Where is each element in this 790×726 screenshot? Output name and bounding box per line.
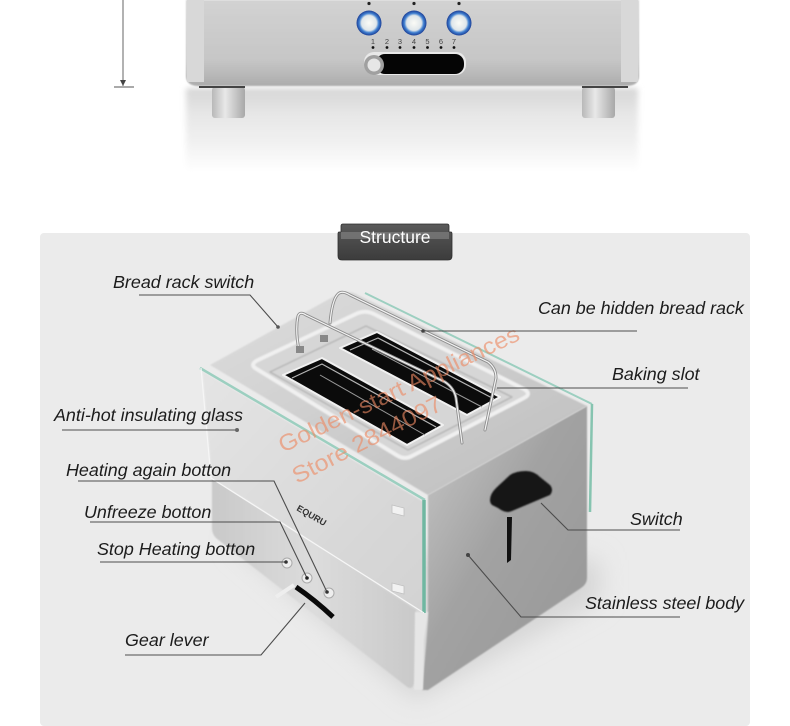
toaster body [186,0,639,86]
reflection below toaster [186,88,638,172]
brand plate: EQURU [295,503,328,528]
black switch handle [490,471,552,563]
callout: Gear lever [125,603,305,655]
bread slot front [283,358,443,445]
callout: Heating again botton: Heating again botton [66,460,231,480]
heading tab: Structure [338,224,452,260]
callout: Stainless steel body: Stainless steel body [585,593,745,613]
gear scale 1-7: 3 [398,37,402,46]
callout: Can be hidden bread rack: Can be hidden bread rack [538,298,745,318]
bread slot back [340,332,500,415]
callout: Heating again botton [66,460,329,594]
gear scale 1-7: 7 [452,37,456,46]
gear slider [364,52,466,75]
callout: Bread rack switch [113,272,280,329]
callout: Stop Heating botton: Stop Heating botton [97,539,255,559]
gear scale 1-7: 2 [385,37,389,46]
callout: Switch [541,503,683,530]
hidden bread rack wires [296,292,496,443]
toaster product illustration [200,292,600,700]
heading tab: Structure: Structure [360,227,430,247]
blue ring knobs [356,2,472,35]
stainless steel side face [422,406,587,690]
callout: Can be hidden bread rack [421,298,745,333]
floor shadow [230,540,600,700]
gear scale 1-7: 1 [371,37,375,46]
front controls [276,558,334,617]
callout: Stainless steel body [466,553,745,617]
callout: Unfreeze botton [84,502,309,580]
gear scale 1-7: 4 [412,37,416,46]
lower front body [212,478,416,688]
gear scale 1-7: 5 [425,37,430,46]
callout: Unfreeze botton: Unfreeze botton [84,502,211,522]
toaster legs [199,86,628,118]
callout: Bread rack switch: Bread rack switch [113,272,254,292]
top face [210,292,587,495]
callout: Anti-hot insulating glass: Anti-hot insulating glass [53,405,243,425]
chrome slot frame [253,312,528,458]
watermark: Store 2844097 [287,390,446,488]
callout: Baking slot: Baking slot [612,364,701,384]
toaster front view: cropped product photo [186,0,639,172]
insulating glass edges [200,293,592,613]
gear scale 1-7: 6 [439,37,443,46]
callout: Gear lever: Gear lever [125,630,210,650]
panel: structure background [40,233,750,726]
glass clips [392,505,404,594]
front panel behind glass [203,372,424,613]
callout: Switch: Switch [630,509,683,529]
callout: Stop Heating botton [97,539,288,564]
height dimension arrow [114,0,134,87]
gear scale 1-7 [371,37,456,49]
watermark: Golden-start Appliances [274,320,523,458]
